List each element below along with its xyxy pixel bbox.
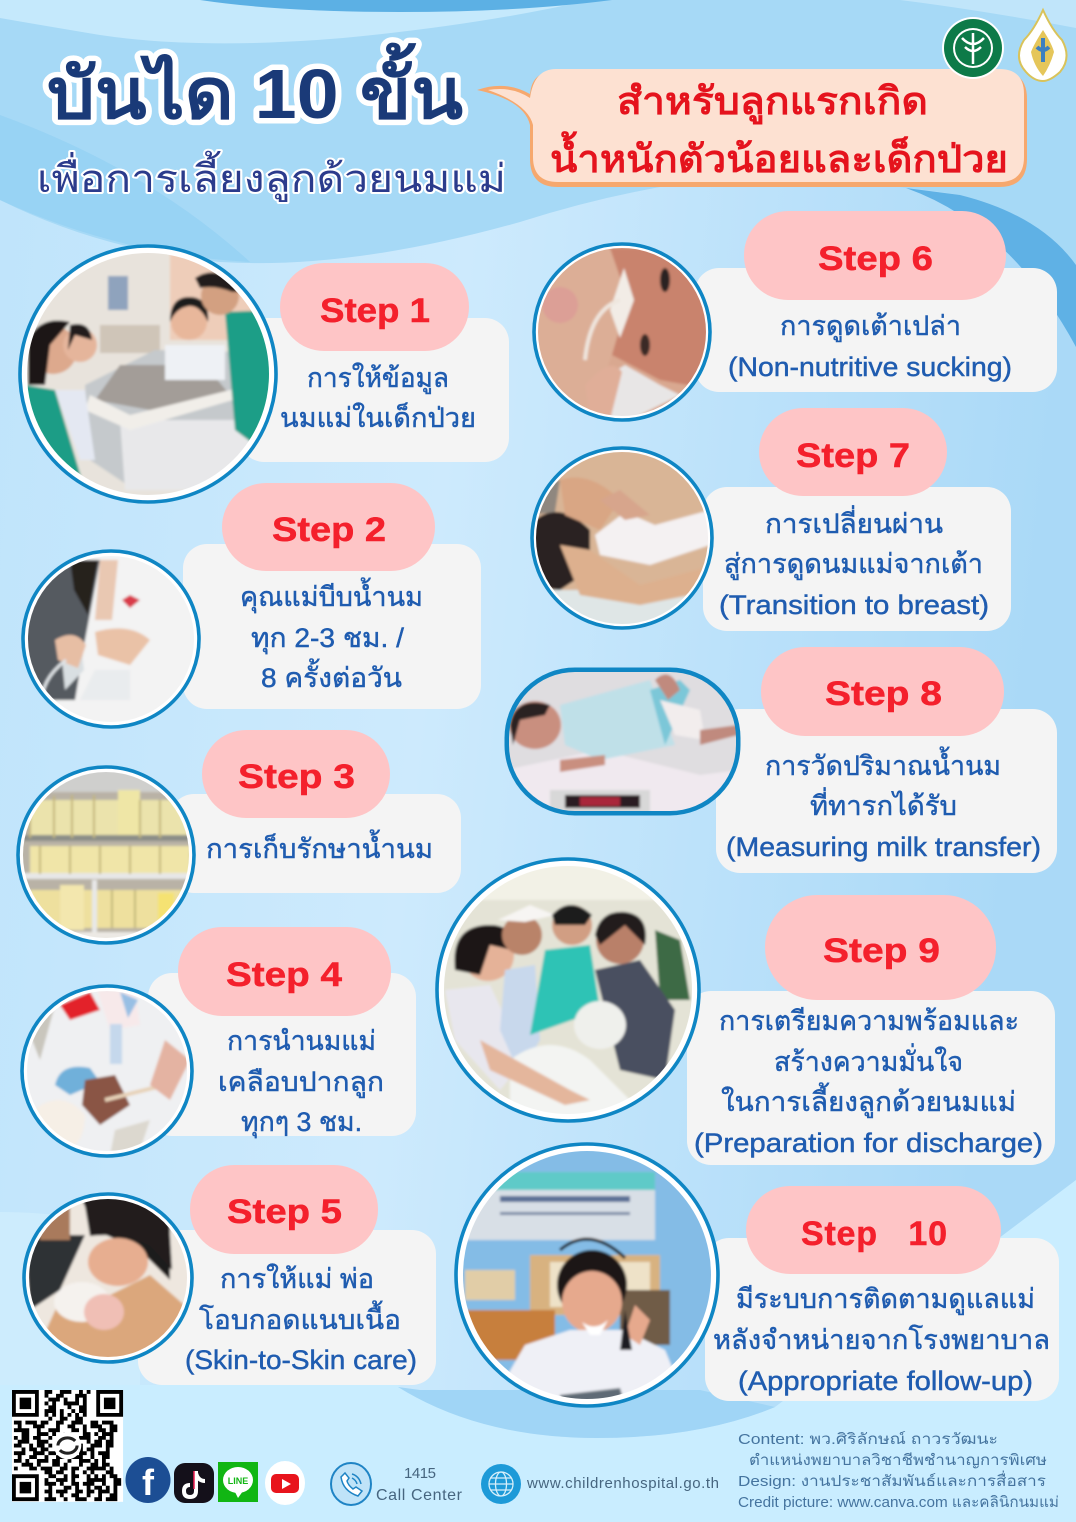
icon: ministry logo (942, 17, 1004, 79)
panel: step 1: การให้ข้อมูล (307, 362, 449, 394)
panel: step 7: สู่การดูดนมแม่จากเต้า (724, 549, 983, 580)
panel: step 5: (Skin-to-Skin care) (185, 1345, 417, 1375)
panel: step 7: (Transition to breast) (719, 590, 989, 620)
panel: step 1: นมแม่ในเด็กป่วย (280, 400, 476, 433)
photo: baby at the breast (536, 452, 708, 624)
title: บันได 10 ขั้น (47, 42, 463, 133)
panel: step 2: ทุก 2-3 ชม. / (251, 623, 405, 655)
callout: for newborns (477, 69, 1027, 187)
panel: step 9: ในการเลี้ยงลูกด้วยนมแม่ (721, 1082, 1016, 1118)
call center number: 1415 (404, 1465, 436, 1482)
panel: step 8: (Measuring milk transfer) (726, 832, 1041, 862)
panel: step 10: หลังจำหน่ายจากโรงพยาบาล (713, 1325, 1050, 1355)
panel: step 2: คุณแม่บีบน้ำนม (240, 577, 423, 614)
panel: step 6: การดูดเต้าเปล่า (780, 311, 961, 342)
photo: skin-to-skin care (29, 1199, 187, 1357)
credits: Design: งานประชาสัมพันธ์และการสื่อสาร (738, 1470, 1046, 1490)
panel: step 10 (455, 1144, 1059, 1410)
icon: youtube (265, 1461, 305, 1505)
icon: phone (331, 1463, 371, 1505)
panel: step 8: ที่ทารกได้รับ (810, 787, 957, 821)
panel: step 9: (Preparation for discharge) (694, 1128, 1043, 1158)
panel: step 2 (20, 483, 481, 730)
subtitle: เพื่อการเลี้ยงลูกด้วยนมแม่ (37, 150, 506, 202)
panel: step 3: การเก็บรักษาน้ำนม (206, 829, 433, 864)
icon: facebook (126, 1457, 170, 1503)
icon: tiktok (174, 1463, 214, 1503)
panel: step 10: มีระบบการติดตามดูแลแม่ (736, 1284, 1035, 1315)
panel: step 1 (20, 246, 509, 502)
panel: step 4: เคลือบปากลูก (218, 1067, 384, 1098)
photo: baby non-nutritive sucking (538, 248, 706, 416)
credits: Credit picture: www.canva.com และคลินิกนมแม่ (738, 1494, 1059, 1511)
panel: step 7: Step 7 (796, 437, 910, 475)
website: www.childrenhospital.go.th (526, 1475, 719, 1492)
photo: nurses preparing mother (444, 866, 692, 1114)
photo: nurse on the telephone (463, 1151, 711, 1399)
panel: step 8 (505, 647, 1057, 873)
photo: mother expressing milk (28, 556, 194, 722)
panel: step 9: Step 9 (823, 932, 940, 970)
panel: step 9 (435, 859, 1055, 1165)
panel: step 5: การให้แม่ พ่อ (220, 1263, 374, 1294)
panel: step 7 (530, 408, 1011, 635)
icon: globe (481, 1464, 521, 1504)
panel: step 5 (24, 1165, 436, 1385)
icon: hospital emblem (1019, 10, 1067, 81)
panel: step 5: Step 5 (227, 1193, 342, 1231)
photo: staff around incubator (20, 250, 280, 500)
panel: step 1: Step 1 (320, 292, 430, 330)
call center number (376, 1465, 463, 1504)
call center number: Call Center (376, 1487, 463, 1504)
panel: step 8: การวัดปริมาณน้ำนม (765, 746, 1001, 781)
credits: Content: พว.ศิริลักษณ์ ถาวรวัฒนะ (738, 1431, 998, 1448)
photo: baby on scale (505, 668, 740, 815)
panel: step 4: การนำนมแม่ (227, 1026, 376, 1056)
panel: step 8: Step 8 (825, 675, 942, 713)
credits: ตำแหน่งพยาบาลวิชาชีพชำนาญการพิเศษ (749, 1452, 1047, 1469)
panel: step 5: โอบกอดแนบเนื้อ (199, 1300, 401, 1335)
panel: step 9: สร้างความมั่นใจ (774, 1043, 963, 1077)
panel: step 2: 8 ครั้งต่อวัน (261, 658, 402, 693)
panel: step 6: (Non-nutritive sucking) (728, 352, 1012, 382)
panel: step 7: การเปลี่ยนผ่าน (765, 505, 943, 539)
callout: for newborns: สำหรับลูกแรกเกิด (617, 81, 928, 125)
panel: step 10: Step 10 (801, 1215, 947, 1253)
panel: step 4: Step 4 (226, 956, 342, 994)
photo: stored milk bags (23, 772, 189, 938)
panel: step 3: Step 3 (238, 758, 355, 796)
photo: oral colostrum for baby (27, 991, 187, 1151)
panel: step 9: การเตรียมความพร้อมและ (719, 1006, 1019, 1036)
panel: step 10: (Appropriate follow-up) (738, 1366, 1033, 1396)
panel: step 4 (20, 927, 416, 1160)
panel: step 6 (534, 211, 1057, 425)
callout: for newborns: น้ำหนักตัวน้อยและเด็กป่วย (550, 131, 1008, 181)
panel: step 3 (18, 730, 461, 945)
QR code (12, 1390, 123, 1502)
panel: step 2: Step 2 (272, 511, 386, 549)
panel: step 6: Step 6 (818, 240, 933, 278)
panel: step 4: ทุกๆ 3 ชม. (241, 1107, 362, 1139)
credits (738, 1431, 1059, 1511)
icon: facebook: f (142, 1462, 155, 1503)
icon: line (218, 1462, 258, 1502)
icon: line: LINE (228, 1476, 248, 1486)
